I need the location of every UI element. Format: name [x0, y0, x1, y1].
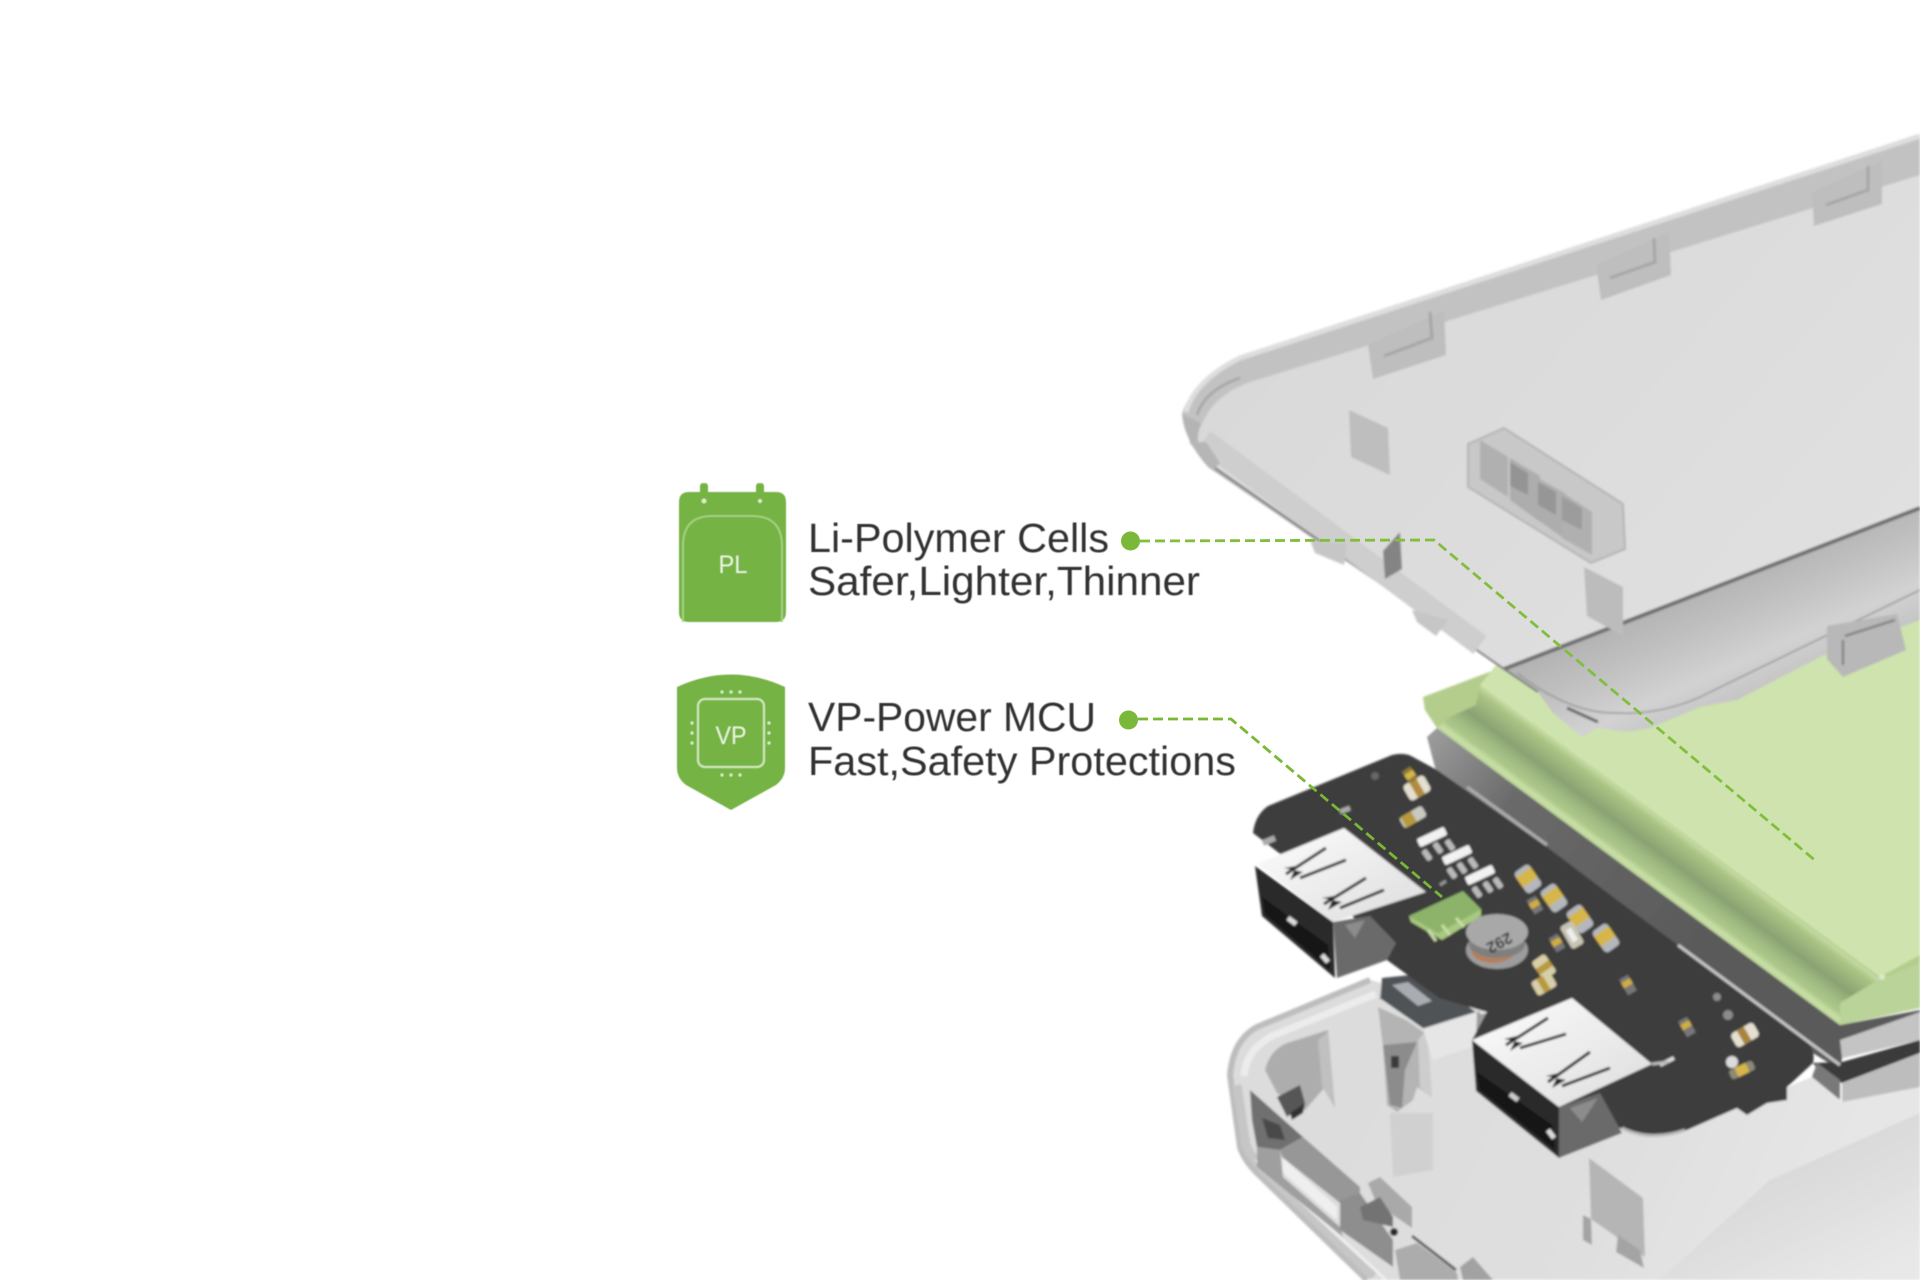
icon: VP shield — [677, 674, 785, 810]
case clips and bands — [1250, 1085, 1493, 1280]
text block: Li-Polymer Cells: Li-Polymer Cells — [808, 515, 1109, 561]
bottom case — [1230, 980, 1920, 1280]
lid posts — [1349, 410, 1625, 636]
text block: VP-Power MCU — [808, 694, 1236, 784]
case post — [1589, 1158, 1645, 1257]
icon: PL battery: PL — [718, 551, 748, 579]
inductor coil — [1466, 914, 1528, 969]
text block: Li-Polymer Cells: Safer,Lighter,Thinner — [808, 558, 1200, 604]
text block: Li-Polymer Cells — [808, 515, 1200, 604]
battery cell — [1423, 470, 1920, 1025]
green MCU chip — [1409, 891, 1481, 941]
chip pins — [1417, 827, 1504, 899]
battery bottom layers — [1427, 728, 1920, 1102]
icon: VP shield: VP — [716, 722, 746, 750]
exploded power bank illustration — [1182, 136, 1920, 1280]
leader line: VP-Power MCU — [1119, 710, 1442, 897]
USB port left — [1255, 828, 1426, 978]
leader line: Li-Polymer Cells — [1121, 532, 1817, 862]
top lid — [1182, 136, 1920, 737]
text block: VP-Power MCU: VP-Power MCU — [808, 694, 1096, 740]
translucent port post — [1378, 1007, 1433, 1177]
lid tabs — [1189, 161, 1906, 722]
inductor coil: 292 — [1483, 928, 1515, 956]
USB port right — [1472, 998, 1668, 1158]
micro USB port — [1380, 975, 1493, 1060]
icon: PL battery — [679, 483, 786, 622]
circuit board — [1253, 754, 1840, 1136]
case inner wall — [1265, 1030, 1335, 1110]
capacitors — [1263, 766, 1760, 1080]
text block: VP-Power MCU: Fast,Safety Protections — [808, 738, 1236, 784]
